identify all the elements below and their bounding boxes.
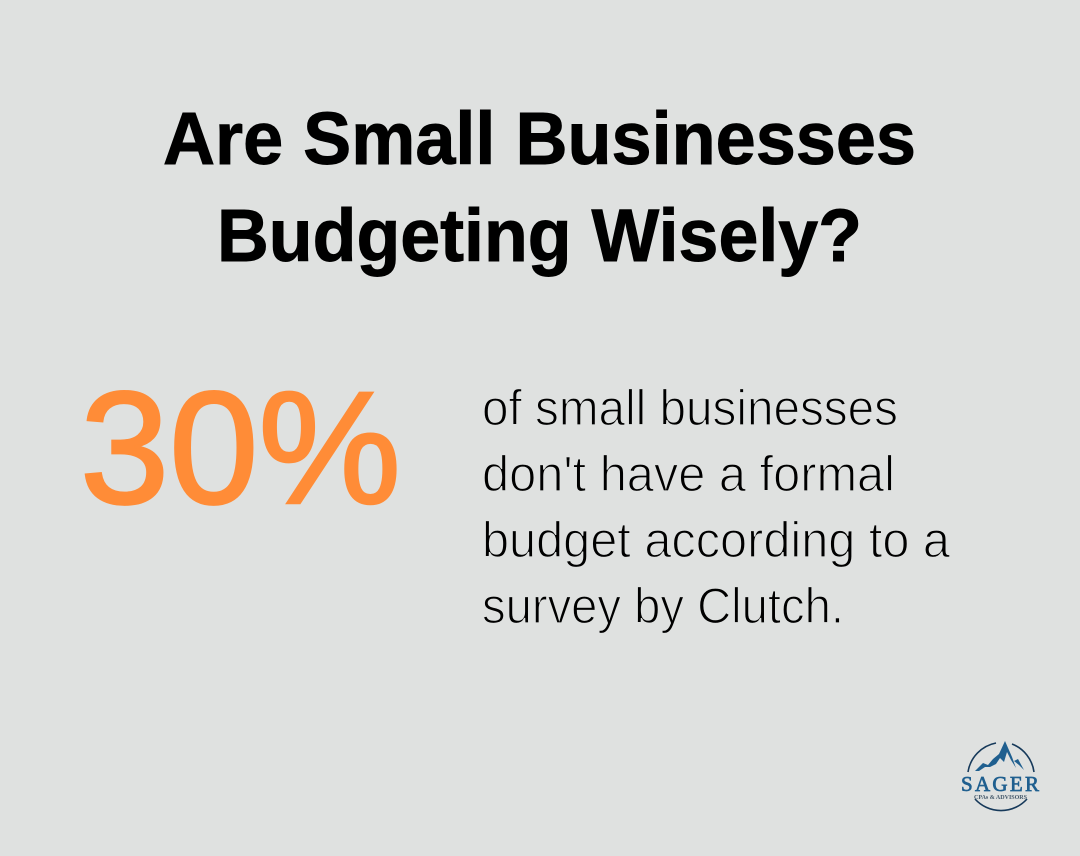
description text: survey by Clutch. [482,578,844,634]
logo ring [968,743,1034,811]
title: Are Small Businesses [163,97,916,180]
description text: budget according to a [482,512,950,568]
big statistic: 30%: 30% [80,358,401,537]
description text: of small businesses [482,380,898,436]
description text [482,380,950,634]
logo: Sager CPAs & Advisors [961,741,1039,811]
logo tagline: CPAs & ADVISORS [974,795,1028,801]
logo wordmark: SAGER [961,772,1039,796]
icon: mountains [975,741,1016,771]
description text: don't have a formal [482,446,895,502]
title: Budgeting Wisely? [217,194,862,277]
title [163,97,916,277]
